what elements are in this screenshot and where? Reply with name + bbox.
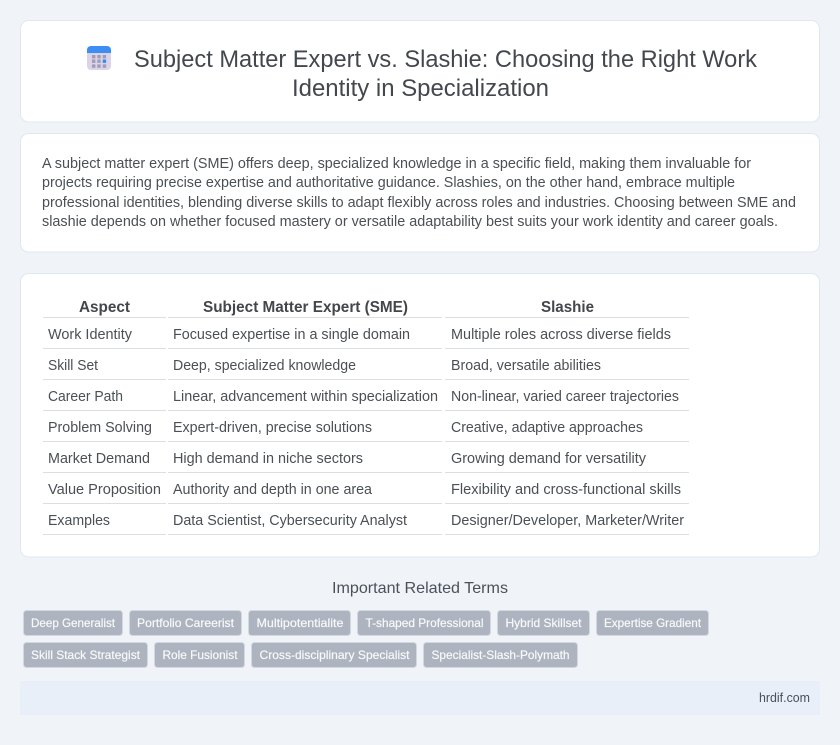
text block: introduction [42,156,796,230]
tag: role fusionist [154,642,244,668]
icon: calendar [87,46,111,70]
tag: skill stack strategist [24,642,148,668]
tags: related terms [24,610,708,668]
title: Identity in Specialization [292,75,549,102]
row: value proposition: Value Proposition [48,482,161,498]
tag: expertise gradient [596,610,708,636]
row: work identity: Multiple roles across diverse fields [451,327,671,343]
table header: Slashie [541,299,594,316]
row: career path: Non-linear, varied career trajectories [451,389,679,405]
table header: Aspect [79,299,131,316]
tag: t-shaped professional [358,610,490,636]
row: problem solving: Expert-driven, precise solutions [173,420,372,436]
tag: portfolio careerist [130,610,242,636]
tag: deep generalist [24,610,122,636]
row: examples [48,513,684,529]
tag: portfolio careerist: Portfolio Careerist [137,616,235,630]
tag: specialist-slash-polymath: Specialist-Slash-Polymath [432,648,570,662]
panel: comparison table [20,274,820,557]
tag: t-shaped professional: T-shaped Professional [366,616,484,630]
row: skill set [48,358,601,374]
text block: introduction: slashie depends on whether focused mastery or versatile adaptability best suits your work identity and career goals. [42,214,778,230]
row: work identity: Work Identity [48,327,133,343]
row: market demand [48,451,647,467]
tag: hybrid skillset [498,610,590,636]
row: examples: Data Scientist, Cybersecurity Analyst [173,513,407,529]
tag: multipotentialite [248,610,350,636]
tag: role fusionist: Role Fusionist [162,648,238,662]
tag: cross-disciplinary specialist: Cross-disciplinary Specialist [260,648,410,662]
row: career path [48,389,679,405]
row: examples: Examples [48,513,110,529]
table header [79,299,594,316]
tag: cross-disciplinary specialist [252,642,416,668]
text block: introduction: A subject matter expert (SME) offers deep, specialized knowledge in a specific field, making them invaluable for [42,156,751,172]
row: skill set: Skill Set [48,358,98,374]
row: skill set: Broad, versatile abilities [451,358,601,374]
row: work identity [48,327,671,343]
row: problem solving [48,420,643,436]
text block: introduction: professional identities, blending diverse skills to adapt flexibly across roles and industries. Choosing between SME and [42,195,796,211]
row: value proposition [48,482,681,498]
row: examples: Designer/Developer, Marketer/Writer [451,513,684,529]
footer: hrdif.com [759,690,810,705]
tag: specialist-slash-polymath [424,642,578,668]
row: skill set: Deep, specialized knowledge [173,358,356,374]
tag: expertise gradient: Expertise Gradient [604,616,702,630]
tag: skill stack strategist: Skill Stack Strategist [31,648,141,662]
title [134,46,758,102]
row: problem solving: Problem Solving [48,420,152,436]
panel: introduction [20,134,820,252]
row: work identity: Focused expertise in a single domain [173,327,410,343]
row: market demand: High demand in niche sectors [173,451,363,467]
row: problem solving: Creative, adaptive approaches [451,420,643,436]
row: market demand: Growing demand for versatility [451,451,647,467]
table header: Subject Matter Expert (SME) [203,299,408,316]
row: career path: Career Path [48,389,123,405]
footer [20,681,820,715]
panel: header [20,20,820,122]
row: market demand: Market Demand [48,451,150,467]
row: career path: Linear, advancement within specialization [173,389,438,405]
tag: hybrid skillset: Hybrid Skillset [506,616,582,630]
tag: multipotentialite: Multipotentialite [256,616,344,630]
row: value proposition: Flexibility and cross-functional skills [451,482,681,498]
title: Subject Matter Expert vs. Slashie: Choosing the Right Work [134,46,758,73]
row: value proposition: Authority and depth in one area [173,482,372,498]
text block: introduction: projects requiring precise expertise and authoritative guidance. Slashies, on the other hand, embrace multiple [42,175,735,191]
tag: deep generalist: Deep Generalist [31,616,116,630]
heading: important related terms: Important Related Terms [332,580,508,597]
